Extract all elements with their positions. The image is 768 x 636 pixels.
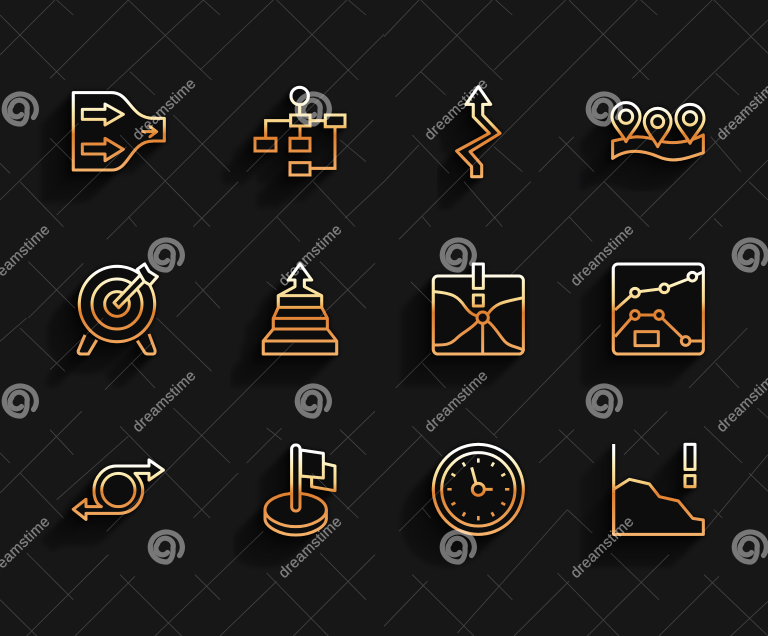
upper series [615, 272, 703, 310]
pin 3 [676, 104, 704, 143]
pyramid outline [263, 264, 337, 354]
middle box [290, 138, 310, 151]
flag pole [292, 445, 300, 511]
map frame [433, 276, 523, 354]
watermark text: dreamstime [129, 367, 200, 436]
left leg [78, 335, 97, 354]
watermark spirals [4, 94, 766, 562]
funnel outline [73, 93, 164, 170]
watermark text: dreamstime [129, 75, 200, 144]
wavy map banner [613, 135, 703, 160]
lower arrow [82, 138, 123, 161]
icon: winding arrow [457, 87, 500, 177]
icon: clock [433, 444, 523, 534]
hour ticks [447, 458, 509, 520]
watermark text: dreamstime [275, 221, 346, 290]
start circle [291, 87, 308, 105]
icon: stepped pyramid with up arrow [263, 264, 337, 354]
cylinder base [265, 493, 326, 535]
double arrow outline [73, 460, 163, 519]
vertical axis [609, 444, 618, 534]
lower series [615, 315, 703, 341]
exclamation mark [473, 264, 483, 306]
small arrow [143, 127, 157, 137]
front flag [301, 450, 323, 478]
icon: circular detour arrow [73, 460, 163, 519]
centre hub [472, 483, 484, 495]
inner circle [102, 473, 135, 507]
small legend box [635, 332, 658, 346]
target rings [79, 266, 155, 342]
arrow fletching [137, 264, 157, 285]
exclamation mark [685, 444, 695, 487]
icon: flowchart [255, 87, 345, 175]
watermark text: dreamstime [421, 367, 492, 436]
icon: map with three location pins [612, 103, 704, 160]
rear flag [312, 463, 335, 491]
upper arrow [82, 104, 123, 125]
icon: bottleneck funnel with arrows [73, 93, 164, 170]
pin 2 [644, 108, 671, 147]
top box [291, 115, 310, 126]
right box [325, 115, 345, 127]
icon: flag on round base [265, 445, 335, 535]
watermark text: dreamstime [567, 221, 638, 290]
chart frame [613, 264, 703, 354]
pin 1 [612, 103, 640, 142]
clock hands [472, 467, 493, 489]
watermark text [0, 75, 768, 582]
junction ring [477, 312, 488, 323]
watermark text: dreamstime [421, 75, 492, 144]
icon: road map with warning mark [433, 264, 523, 354]
left box [255, 138, 276, 151]
arrow shaft [114, 275, 145, 308]
step lines [263, 296, 337, 341]
outer and inner rings [433, 444, 523, 534]
icon: declining area chart with warning mark [614, 444, 703, 534]
route lines [434, 292, 523, 354]
watermark text: dreamstime [567, 513, 638, 582]
icon: archery target with arrow [78, 264, 157, 354]
right leg [137, 334, 155, 354]
watermark text: dreamstime [275, 513, 346, 582]
icon: line chart panel [613, 264, 703, 354]
declining area [614, 479, 703, 534]
bottom box [290, 163, 310, 175]
connector lines [266, 105, 335, 168]
